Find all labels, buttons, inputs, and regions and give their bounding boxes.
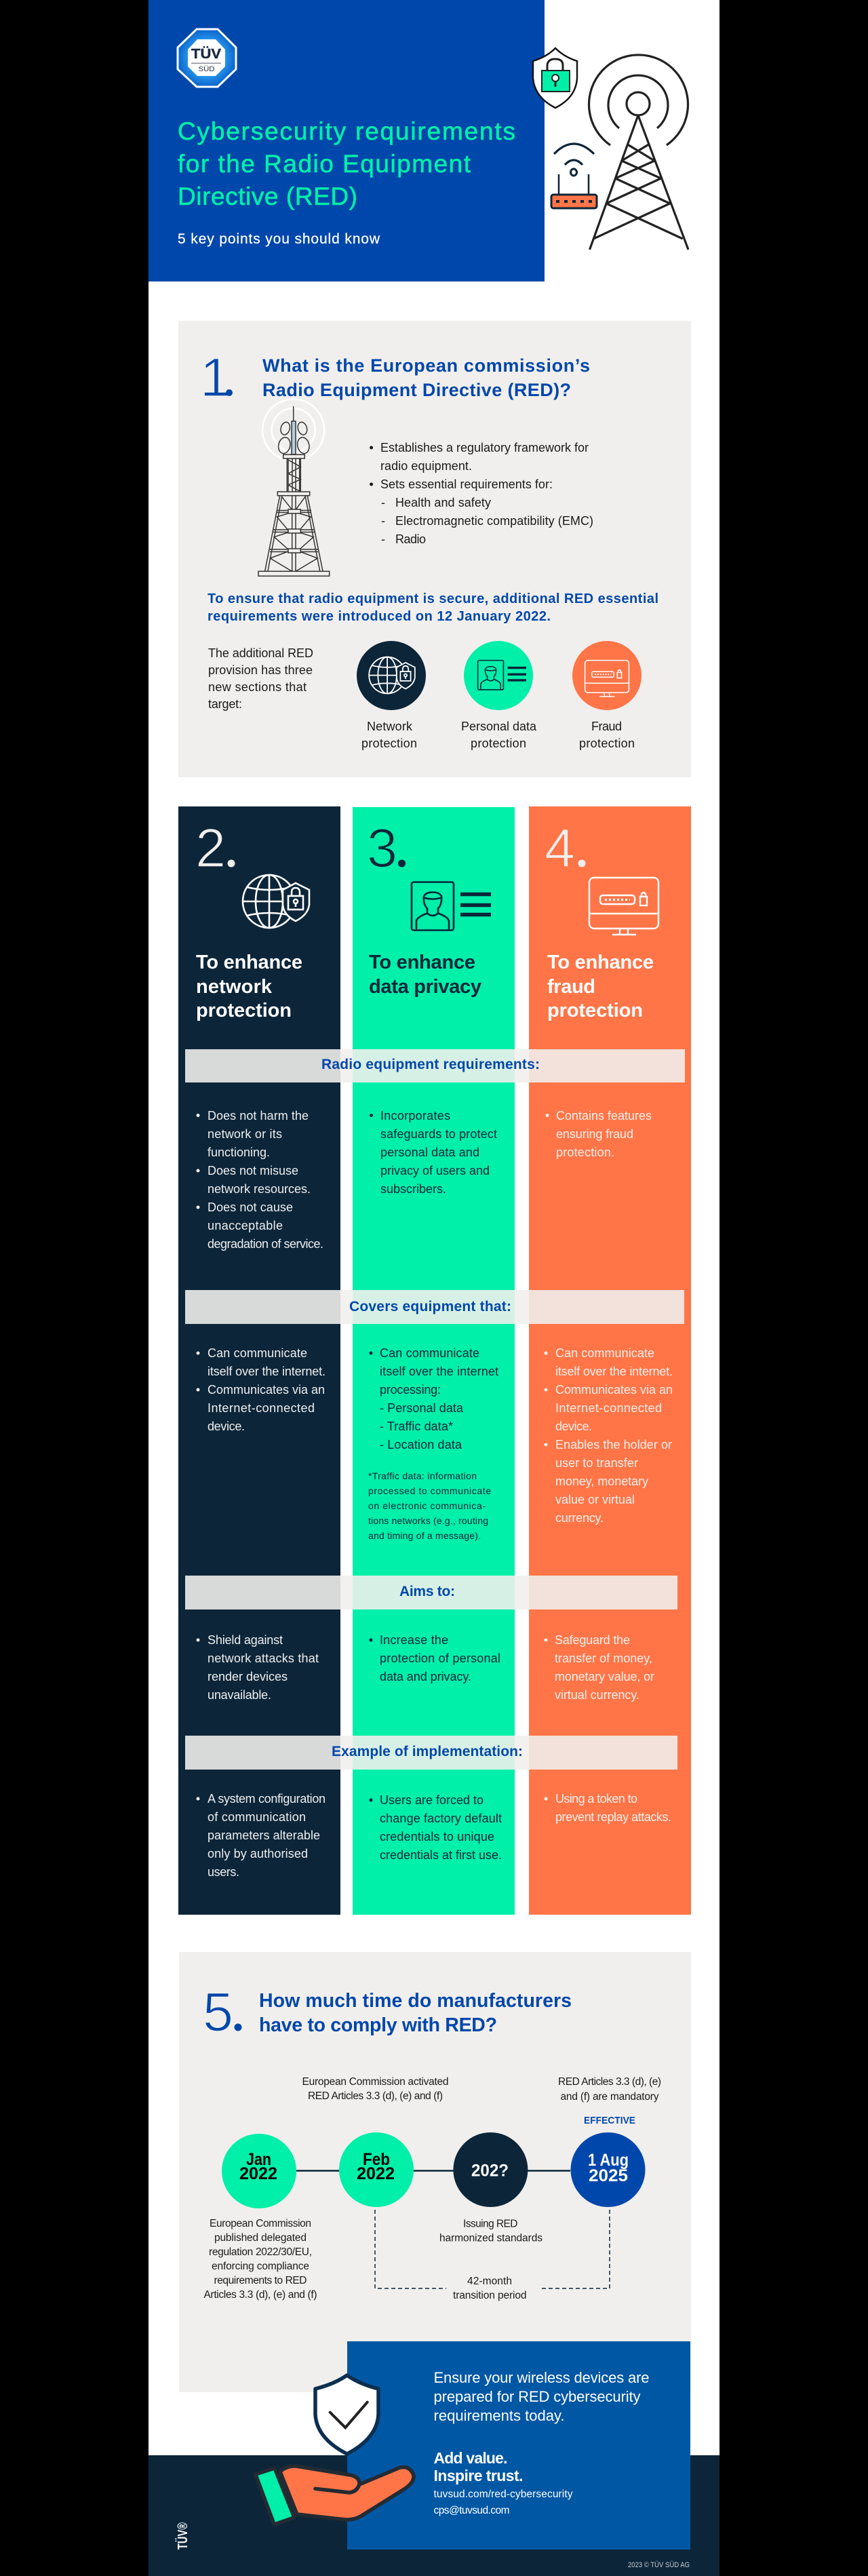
list: covers equipment xyxy=(369,1346,498,1451)
contact links: tuvsud.com/red-cybersecurity xyxy=(434,2489,573,2500)
text: January publication: published delegated xyxy=(214,2232,307,2244)
icon: ID card xyxy=(412,882,491,931)
list: aims: Safeguard the xyxy=(555,1633,630,1647)
text: RED bullet list: Health and safety xyxy=(395,496,491,509)
footer band xyxy=(149,2455,719,2576)
heading: how much time: How much time do manufacturers xyxy=(259,1990,572,2012)
text: RED bullet list: radio equipment. xyxy=(380,459,472,473)
list: aims xyxy=(544,1633,654,1702)
milestone: 202?: 202? xyxy=(471,2161,509,2180)
text: RED bullet list xyxy=(370,441,593,546)
list: radio equipment requirements: Does not cause xyxy=(208,1201,293,1214)
list: radio equipment requirements: Does not harm the xyxy=(208,1109,309,1123)
panel: section 1 RED overview xyxy=(178,321,691,777)
text: January publication: Articles 3.3 (d), (e) and (f) xyxy=(203,2289,317,2301)
heading: enhance fraud protection: protection xyxy=(547,1000,643,1021)
list: aims: monetary value, or xyxy=(555,1670,654,1683)
text: issuing standards: harmonized standards xyxy=(439,2233,542,2244)
list: example: Using a token to xyxy=(555,1792,637,1806)
label: commission activated xyxy=(302,2076,449,2102)
list: aims: protection of personal xyxy=(380,1652,500,1665)
list: example: Users are forced to xyxy=(380,1793,484,1807)
tagline xyxy=(434,2449,524,2484)
list: radio equipment requirements: network resources. xyxy=(208,1182,311,1196)
list: covers equipment: Can communicate xyxy=(380,1346,479,1360)
label: transition period: 42-month xyxy=(467,2276,512,2287)
panel: column 3 data privacy xyxy=(353,807,515,1915)
heading: enhance data privacy: To enhance xyxy=(369,952,475,973)
footnote: traffic data xyxy=(368,1470,491,1541)
callout: additional requirements xyxy=(208,591,658,624)
tagline: Add value. xyxy=(434,2449,507,2467)
list: covers equipment: device. xyxy=(208,1420,245,1433)
milestone: Feb 2022: 2022 xyxy=(357,2164,395,2183)
text: RED bullet list: Establishes a regulatory framework for xyxy=(380,441,589,454)
label: mandatory: and (f) are mandatory xyxy=(560,2091,659,2103)
icon: open hand xyxy=(256,2466,414,2524)
text: January publication: requirements to RED xyxy=(214,2275,307,2286)
label: transition period: transition period xyxy=(453,2290,526,2301)
label: mandatory xyxy=(558,2076,661,2103)
logo: TÜV SÜD: SÜD xyxy=(198,65,215,73)
heading: what is RED: Radio Equipment Directive (RED)? xyxy=(262,380,571,400)
label: commission activated: European Commission activated xyxy=(302,2076,449,2088)
list: radio equipment requirements: subscribers. xyxy=(380,1182,446,1196)
heading: enhance fraud protection: fraud xyxy=(547,976,595,998)
heading: enhance data privacy: data privacy xyxy=(369,976,481,998)
list: example: only by authorised xyxy=(208,1847,308,1860)
list: radio equipment requirements: degradation of service. xyxy=(208,1237,323,1251)
label: personal data protection: Personal data xyxy=(461,720,537,733)
label: network protection xyxy=(361,720,417,750)
contact links: cps@tuvsud.com xyxy=(434,2505,510,2516)
heading: enhance network protection: To enhance xyxy=(196,952,302,973)
list: radio equipment requirements: privacy of users and xyxy=(380,1164,490,1177)
list: radio equipment requirements xyxy=(197,1109,323,1251)
list: example xyxy=(197,1792,326,1879)
list: example: A system configuration xyxy=(208,1792,326,1806)
list: covers equipment: Enables the holder or xyxy=(555,1438,672,1451)
list: covers equipment xyxy=(544,1346,673,1525)
number 4: 4 xyxy=(545,818,575,879)
number 3: 3 xyxy=(367,818,397,879)
label: personal data protection xyxy=(461,720,537,750)
heading: enhance network protection: network xyxy=(196,976,273,998)
milestone: 1 Aug 2025: 2025 xyxy=(589,2166,628,2185)
text: three new sections: The additional RED xyxy=(208,646,313,660)
heading: enhance fraud protection: To enhance xyxy=(547,952,654,973)
label: fraud protection xyxy=(579,720,635,750)
heading: what is RED: What is the European commission’s xyxy=(262,355,590,376)
list: covers equipment: Can communicate xyxy=(555,1346,654,1360)
milestone: Feb 2022: Feb xyxy=(363,2150,390,2169)
band: covers equipment xyxy=(185,1290,684,1324)
heading: how much time: have to comply with RED? xyxy=(259,2014,497,2036)
list: example: prevent replay attacks. xyxy=(555,1810,671,1824)
number 1: 1 xyxy=(200,347,231,408)
icon: fraud protection xyxy=(572,641,642,710)
list: covers equipment xyxy=(197,1346,326,1433)
icon: monitor with password xyxy=(589,878,658,935)
list: example: parameters alterable xyxy=(208,1829,320,1842)
text: RED bullet list: - xyxy=(381,514,385,528)
milestone: Jan 2022: Jan xyxy=(246,2150,271,2169)
band: example of implementation: Example of implementation: xyxy=(332,1744,523,1759)
list: covers equipment: value or virtual xyxy=(555,1493,635,1506)
milestone: 202? xyxy=(453,2132,528,2207)
list: radio equipment requirements: Contains features xyxy=(556,1109,652,1123)
transition period bracket xyxy=(375,2210,610,2288)
text: three new sections: new sections that xyxy=(208,680,307,694)
list: aims: transfer of money, xyxy=(555,1652,652,1665)
list: aims: render devices xyxy=(208,1670,288,1683)
list: example xyxy=(369,1793,502,1862)
title xyxy=(178,117,515,210)
text: ensure devices prepared: requirements today. xyxy=(434,2407,564,2424)
band: radio equipment requirements: Radio equipment requirements: xyxy=(321,1057,540,1072)
title: Directive (RED) xyxy=(178,182,357,210)
list: covers equipment: Communicates via an xyxy=(555,1383,673,1397)
list: covers equipment: device. xyxy=(555,1420,592,1433)
list: radio equipment requirements: personal data and xyxy=(380,1146,479,1159)
list: covers equipment: Internet-connected xyxy=(555,1401,662,1415)
footnote: traffic data: tions networks (e.g., routing xyxy=(368,1515,488,1526)
heading: what is RED xyxy=(262,355,590,400)
milestone: Jan 2022 xyxy=(222,2134,296,2208)
list: radio equipment requirements: protection. xyxy=(556,1146,614,1159)
list: covers equipment: money, monetary xyxy=(555,1475,648,1488)
label: network protection: protection xyxy=(361,737,417,750)
icon: wifi router xyxy=(551,144,597,208)
text: January publication: regulation 2022/30/EU, xyxy=(209,2246,312,2258)
band: example of implementation xyxy=(185,1736,677,1770)
band: covers equipment: Covers equipment that: xyxy=(349,1299,511,1314)
list: example: credentials at first use. xyxy=(380,1848,502,1862)
label: fraud protection: protection xyxy=(579,737,635,750)
footnote: traffic data: on electronic communica- xyxy=(368,1500,486,1511)
text: January publication: European Commission xyxy=(210,2218,311,2229)
list: covers equipment: - Location data xyxy=(380,1438,462,1451)
label: commission activated: RED Articles 3.3 (d), (e) and (f) xyxy=(308,2090,443,2102)
text: issuing standards xyxy=(439,2218,542,2244)
icon: globe with shield xyxy=(243,875,309,928)
list: covers equipment: Can communicate xyxy=(208,1346,307,1360)
list: example: of communication xyxy=(208,1810,306,1824)
footnote: traffic data: and timing of a message). xyxy=(368,1530,481,1541)
panel: column 2 network protection xyxy=(178,806,340,1915)
list: aims: Shield against xyxy=(208,1633,283,1647)
TÜV mark: TÜV® xyxy=(175,2522,191,2550)
list: example: users. xyxy=(208,1865,239,1879)
icon: radio tower xyxy=(589,55,688,250)
list: radio equipment requirements: safeguards to protect xyxy=(380,1127,497,1141)
list: aims xyxy=(369,1633,500,1683)
logo: TÜV SÜD: TÜV xyxy=(191,46,222,62)
heading: enhance network protection xyxy=(196,952,302,1021)
list: radio equipment requirements: ensuring fraud xyxy=(556,1127,633,1141)
list: covers equipment: itself over the internet xyxy=(380,1365,498,1378)
panel: section 5 timeline xyxy=(179,1952,691,2392)
list: example xyxy=(544,1792,671,1824)
list: radio equipment requirements: Incorporates xyxy=(380,1109,450,1123)
list: radio equipment requirements: network or its xyxy=(208,1127,282,1141)
list: covers equipment: - Personal data xyxy=(380,1401,464,1415)
list: covers equipment: currency. xyxy=(555,1511,604,1525)
footnote: traffic data: processed to communicate xyxy=(368,1485,491,1496)
text: RED bullet list: - xyxy=(381,496,385,509)
heading: enhance data privacy xyxy=(369,952,481,998)
heading: how much time xyxy=(259,1990,572,2036)
list: aims: virtual currency. xyxy=(555,1688,639,1702)
icon: cell tower xyxy=(258,399,330,576)
text: three new sections xyxy=(208,646,313,711)
panel: call to action xyxy=(347,2341,690,2550)
text: three new sections: target: xyxy=(208,697,242,711)
callout: additional requirements: To ensure that radio equipment is secure, additional RED essential xyxy=(208,591,658,606)
contact links xyxy=(434,2489,573,2516)
list: radio equipment requirements: Does not misuse xyxy=(208,1164,298,1177)
callout: additional requirements: requirements were introduced on 12 January 2022. xyxy=(208,609,551,624)
list: covers equipment: processing: xyxy=(380,1383,441,1397)
text: RED bullet list: Radio xyxy=(395,532,426,546)
text: ensure devices prepared xyxy=(434,2369,650,2424)
white page sheet xyxy=(149,0,719,2576)
milestone: Jan 2022: 2022 xyxy=(239,2164,277,2183)
list: covers equipment: user to transfer xyxy=(555,1456,638,1470)
list: covers equipment: - Traffic data* xyxy=(380,1420,453,1433)
list: aims xyxy=(197,1633,319,1702)
list: covers equipment: itself over the internet. xyxy=(208,1365,326,1378)
copyright: 2023 © TÜV SÜD AG xyxy=(628,2561,690,2569)
band: radio equipment requirements xyxy=(185,1049,685,1082)
list: example: credentials to unique xyxy=(380,1830,494,1843)
milestone: Feb 2022 xyxy=(339,2132,414,2207)
list: radio equipment requirements xyxy=(545,1109,652,1159)
label: personal data protection: protection xyxy=(471,737,526,750)
list: example: change factory default xyxy=(380,1812,502,1825)
panel: column 4 fraud protection xyxy=(529,806,691,1915)
label: mandatory: RED Articles 3.3 (d), (e) xyxy=(558,2076,661,2088)
text: ensure devices prepared: prepared for RED cybersecurity xyxy=(434,2388,640,2405)
number 2: 2 xyxy=(195,818,226,879)
subtitle: 5 key points you should know xyxy=(178,231,380,247)
text: January publication: enforcing compliance xyxy=(212,2261,309,2272)
list: aims: data and privacy. xyxy=(380,1670,471,1683)
icon: personal data protection xyxy=(464,641,533,710)
icon: padlock shield xyxy=(533,48,577,108)
heading: enhance fraud protection xyxy=(547,952,654,1021)
title: Cybersecurity requirements xyxy=(178,117,515,145)
milestone: 1 Aug 2025 xyxy=(571,2132,646,2207)
list: aims: Increase the xyxy=(380,1633,448,1647)
timeline connector xyxy=(296,2170,570,2172)
text: RED bullet list: - xyxy=(381,532,385,546)
list: radio equipment requirements: unacceptable xyxy=(208,1219,283,1232)
list: radio equipment requirements xyxy=(370,1109,497,1196)
text: ensure devices prepared: Ensure your wireless devices are xyxy=(434,2369,650,2386)
hero banner xyxy=(149,0,545,281)
icon: network protection xyxy=(357,641,426,710)
band: aims to xyxy=(185,1576,677,1609)
label: network protection: Network xyxy=(367,720,413,733)
list: covers equipment: Communicates via an xyxy=(208,1383,325,1397)
tagline: Inspire trust. xyxy=(434,2467,524,2484)
list: covers equipment: itself over the internet. xyxy=(555,1365,673,1378)
text: issuing standards: Issuing RED xyxy=(463,2218,518,2230)
list: aims: network attacks that xyxy=(208,1652,319,1665)
footnote: traffic data: *Traffic data: information xyxy=(368,1470,477,1481)
label: effective: EFFECTIVE xyxy=(584,2115,635,2126)
icon: check shield xyxy=(315,2375,378,2454)
text: January publication xyxy=(203,2218,317,2301)
title: for the Radio Equipment xyxy=(178,150,471,178)
heading: enhance network protection: protection xyxy=(196,1000,292,1021)
number 5: 5 xyxy=(203,1982,233,2043)
label: transition period xyxy=(453,2276,526,2301)
list: covers equipment: Internet-connected xyxy=(208,1401,315,1415)
logo: TÜV SÜD xyxy=(178,29,236,87)
band: aims to: Aims to: xyxy=(399,1584,455,1599)
milestone: 1 Aug 2025: 1 Aug xyxy=(588,2151,629,2170)
list: aims: unavailable. xyxy=(208,1688,271,1702)
label: fraud protection: Fraud xyxy=(591,720,622,733)
list: radio equipment requirements: functioning. xyxy=(208,1146,270,1159)
text: RED bullet list: Sets essential requirements for: xyxy=(380,477,553,491)
text: RED bullet list: Electromagnetic compatibility (EMC) xyxy=(395,514,593,528)
text: three new sections: provision has three xyxy=(208,663,313,677)
